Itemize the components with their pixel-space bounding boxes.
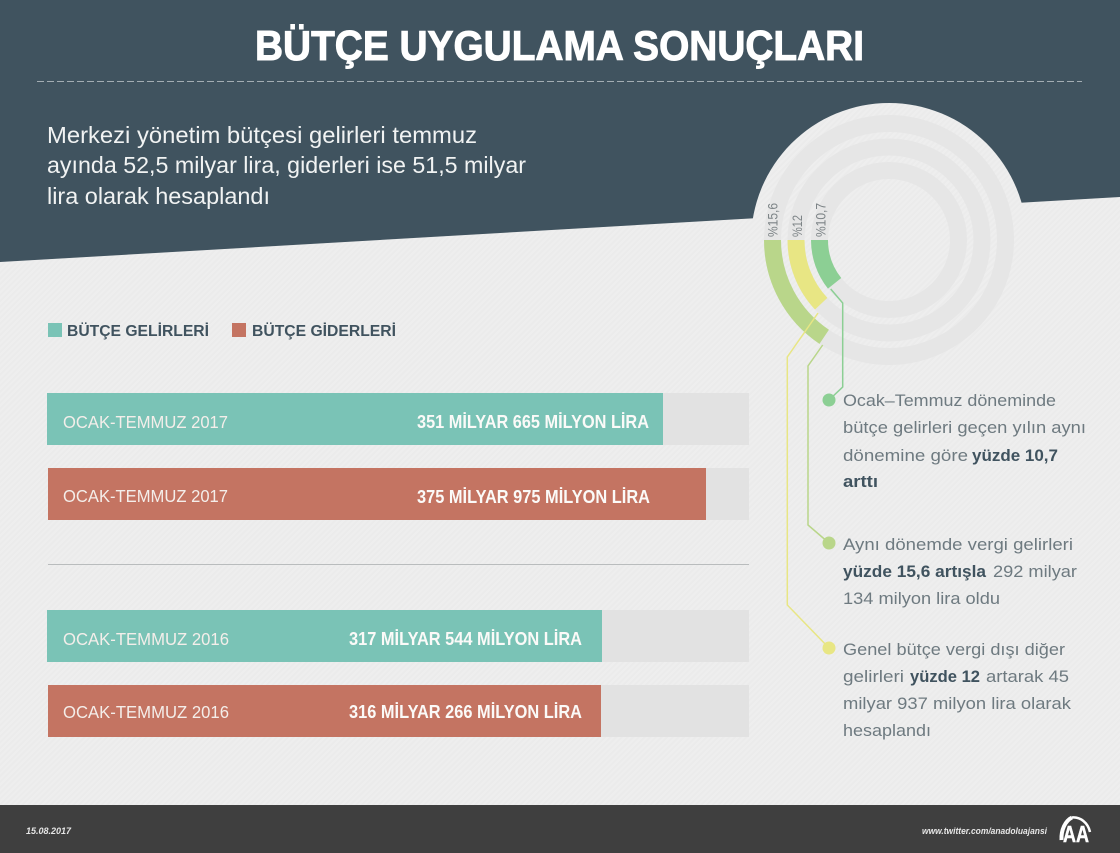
label: %15,6: %15,6 bbox=[764, 203, 780, 237]
dot: 15,6 bbox=[822, 536, 836, 550]
bar: giderler 2016: OCAK-TEMMUZ 2016 bbox=[63, 702, 229, 722]
text block: vergi gelirleri: yüzde 15,6 artışla bbox=[843, 563, 987, 581]
date: 15.08.2017 bbox=[26, 826, 72, 837]
footer bbox=[0, 805, 1120, 853]
legend: BÜTÇE GELİRLERİ bbox=[67, 323, 209, 340]
label: %10,7: %10,7 bbox=[812, 203, 828, 237]
icon: AA logo: AA bbox=[1063, 821, 1089, 847]
text block: vergi gelirleri: Aynı dönemde vergi gelirleri bbox=[843, 536, 1073, 554]
text block: vergi gelirleri bbox=[843, 536, 1078, 608]
text block: diğer gelirler: gelirleri bbox=[843, 668, 904, 686]
radial chart bbox=[751, 103, 1027, 379]
intro text bbox=[47, 122, 526, 209]
intro text: ayında 52,5 milyar lira, giderleri ise 51,5 milyar bbox=[47, 152, 526, 178]
bar: giderler 2016 bbox=[48, 685, 749, 737]
text block: gelirler: yüzde 10,7 bbox=[972, 447, 1058, 465]
intro text: Merkezi yönetim bütçesi gelirleri temmuz bbox=[47, 122, 477, 148]
connector: 10,7 bbox=[829, 289, 843, 400]
arc: 10,7 bbox=[820, 240, 835, 283]
text block: diğer gelirler: artarak 45 bbox=[986, 668, 1069, 686]
bar: giderler 2016: 316 MİLYAR 266 MİLYON LİRA bbox=[349, 702, 582, 722]
intro text: lira olarak hesaplandı bbox=[47, 183, 270, 209]
icon: AA logo bbox=[1061, 817, 1090, 847]
dot: 12 bbox=[822, 642, 836, 654]
text block: gelirler bbox=[843, 392, 1086, 491]
bar: gelirler 2017 bbox=[47, 393, 749, 445]
dot: 10,7 bbox=[822, 394, 836, 406]
label: %12: %12 bbox=[789, 215, 805, 237]
text block: gelirler: bütçe gelirleri geçen yılın aynı bbox=[843, 419, 1086, 437]
header panel bbox=[0, 0, 1120, 262]
text block: diğer gelirler: milyar 937 milyon lira olarak bbox=[843, 695, 1072, 713]
bar: gelirler 2016 bbox=[47, 610, 749, 662]
text block: gelirler: arttı bbox=[843, 473, 878, 491]
text block: diğer gelirler bbox=[843, 641, 1072, 740]
legend: BÜTÇE GİDERLERİ bbox=[252, 323, 396, 340]
bar: giderler 2017 bbox=[48, 468, 749, 520]
bar: gelirler 2017: OCAK-TEMMUZ 2017 bbox=[63, 412, 228, 432]
text block: vergi gelirleri: 292 milyar bbox=[993, 563, 1078, 581]
text block: vergi gelirleri: 134 milyon lira oldu bbox=[843, 590, 1000, 608]
connector: 15,6 bbox=[808, 345, 829, 543]
arc: 15,6 bbox=[772, 240, 824, 337]
text block: gelirler: Ocak–Temmuz döneminde bbox=[843, 392, 1056, 410]
source url: www.twitter.com/anadoluajansi bbox=[922, 826, 1047, 837]
title: BÜTÇE UYGULAMA SONUÇLARI bbox=[255, 22, 864, 69]
text block: gelirler: dönemine göre bbox=[843, 447, 968, 465]
bar: gelirler 2016: OCAK-TEMMUZ 2016 bbox=[63, 629, 229, 649]
bar: giderler 2017: OCAK-TEMMUZ 2017 bbox=[63, 486, 228, 506]
connector: 12 bbox=[787, 313, 829, 648]
arc: 12 bbox=[796, 240, 821, 304]
bar: giderler 2017: 375 MİLYAR 975 MİLYON LİRA bbox=[417, 487, 650, 507]
text block: diğer gelirler: hesaplandı bbox=[843, 722, 931, 740]
text block: diğer gelirler: Genel bütçe vergi dışı diğer bbox=[843, 641, 1066, 659]
bar: gelirler 2016: 317 MİLYAR 544 MİLYON LİRA bbox=[349, 629, 582, 649]
legend bbox=[48, 323, 396, 340]
bar: gelirler 2017: 351 MİLYAR 665 MİLYON LİRA bbox=[417, 412, 649, 432]
text block: diğer gelirler: yüzde 12 bbox=[910, 668, 980, 686]
